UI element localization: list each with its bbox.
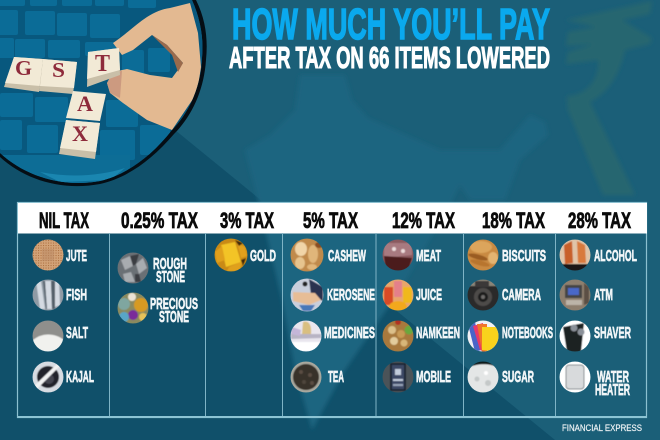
item: camera [467, 279, 541, 312]
item: mobile [382, 361, 451, 393]
item: water heater: HEATER [595, 382, 630, 399]
item: salt [32, 320, 88, 352]
tile G: G [15, 56, 32, 80]
header labels: 12% TAX [392, 208, 455, 233]
header labels: 5% TAX [303, 208, 358, 233]
item: juice [382, 279, 442, 313]
item: kajal [32, 361, 94, 393]
item: water heater: WATER [597, 369, 629, 386]
header labels: 0.25% TAX [121, 208, 198, 233]
item: cashew [290, 238, 366, 272]
item: medicines: MEDICINES [324, 325, 375, 342]
item: gold [214, 238, 276, 272]
tile S [39, 58, 77, 94]
tile X: X [72, 121, 88, 146]
item: sugar [467, 361, 534, 393]
item: precious stone: STONE [159, 309, 189, 326]
header labels: 3% TAX [220, 208, 274, 233]
item: jute [32, 239, 87, 271]
header labels [39, 208, 631, 233]
item: kerosene: KEROSENE [327, 287, 375, 304]
header labels: 28% TAX [568, 208, 631, 233]
item: kerosene [290, 278, 375, 312]
item: rough stone [117, 252, 187, 286]
item: rough stone: ROUGH [153, 256, 187, 273]
tile A [66, 91, 106, 121]
item: namkeen: NAMKEEN [416, 325, 460, 342]
item: alcohol [559, 239, 637, 272]
board [0, 0, 210, 190]
item: mobile: MOBILE [416, 369, 451, 386]
item: atm [559, 279, 613, 311]
item: juice: JUICE [416, 287, 442, 304]
header labels: NIL TAX [39, 208, 89, 233]
item: gold: GOLD [250, 248, 276, 265]
item: jute: JUTE [66, 248, 87, 265]
item: precious stone [117, 292, 198, 326]
text: NOTEBOOKS [502, 325, 553, 342]
item: salt: SALT [66, 325, 88, 342]
bottom border [18, 416, 647, 418]
item: kajal: KAJAL [66, 369, 94, 386]
table frame [18, 202, 646, 418]
india map silhouette [245, 75, 548, 430]
tile S: S [52, 58, 65, 82]
item: medicines [290, 320, 375, 352]
item: meat: MEAT [416, 248, 441, 265]
item: tea: TEA [328, 369, 344, 386]
item: tea [290, 361, 344, 393]
item: biscuits: BISCUITS [502, 248, 546, 265]
item: notebooks [467, 320, 553, 352]
item: camera: CAMERA [502, 287, 541, 304]
background dark wedge [0, 130, 555, 440]
tile G [4, 56, 43, 92]
tile A: A [77, 91, 93, 116]
item: meat [382, 239, 441, 271]
item: fish: FISH [66, 287, 87, 304]
tile T: T [95, 51, 110, 77]
item: fish [32, 279, 87, 311]
tile T [87, 48, 120, 87]
tax table [18, 202, 647, 418]
item: cashew: CASHEW [328, 248, 366, 265]
item: shaver [559, 320, 631, 352]
header labels: 18% TAX [482, 208, 545, 233]
item: sugar: SUGAR [502, 369, 534, 386]
item: atm: ATM [594, 287, 613, 304]
item: namkeen [382, 319, 460, 352]
board edge [0, 0, 207, 186]
item: biscuits [467, 239, 546, 271]
item: shaver: SHAVER [594, 325, 631, 342]
item: water heater [560, 362, 630, 396]
item: precious stone: PRECIOUS [150, 296, 198, 313]
source credit: FINANCIAL EXPRESS [562, 423, 642, 434]
header bar [18, 203, 647, 234]
photo: GST scrabble tiles [0, 0, 210, 190]
rupee symbol [566, 1, 652, 195]
item: rough stone: STONE [156, 269, 185, 286]
column dividers [110, 233, 556, 416]
tile X [59, 120, 100, 159]
hand [107, 3, 201, 130]
